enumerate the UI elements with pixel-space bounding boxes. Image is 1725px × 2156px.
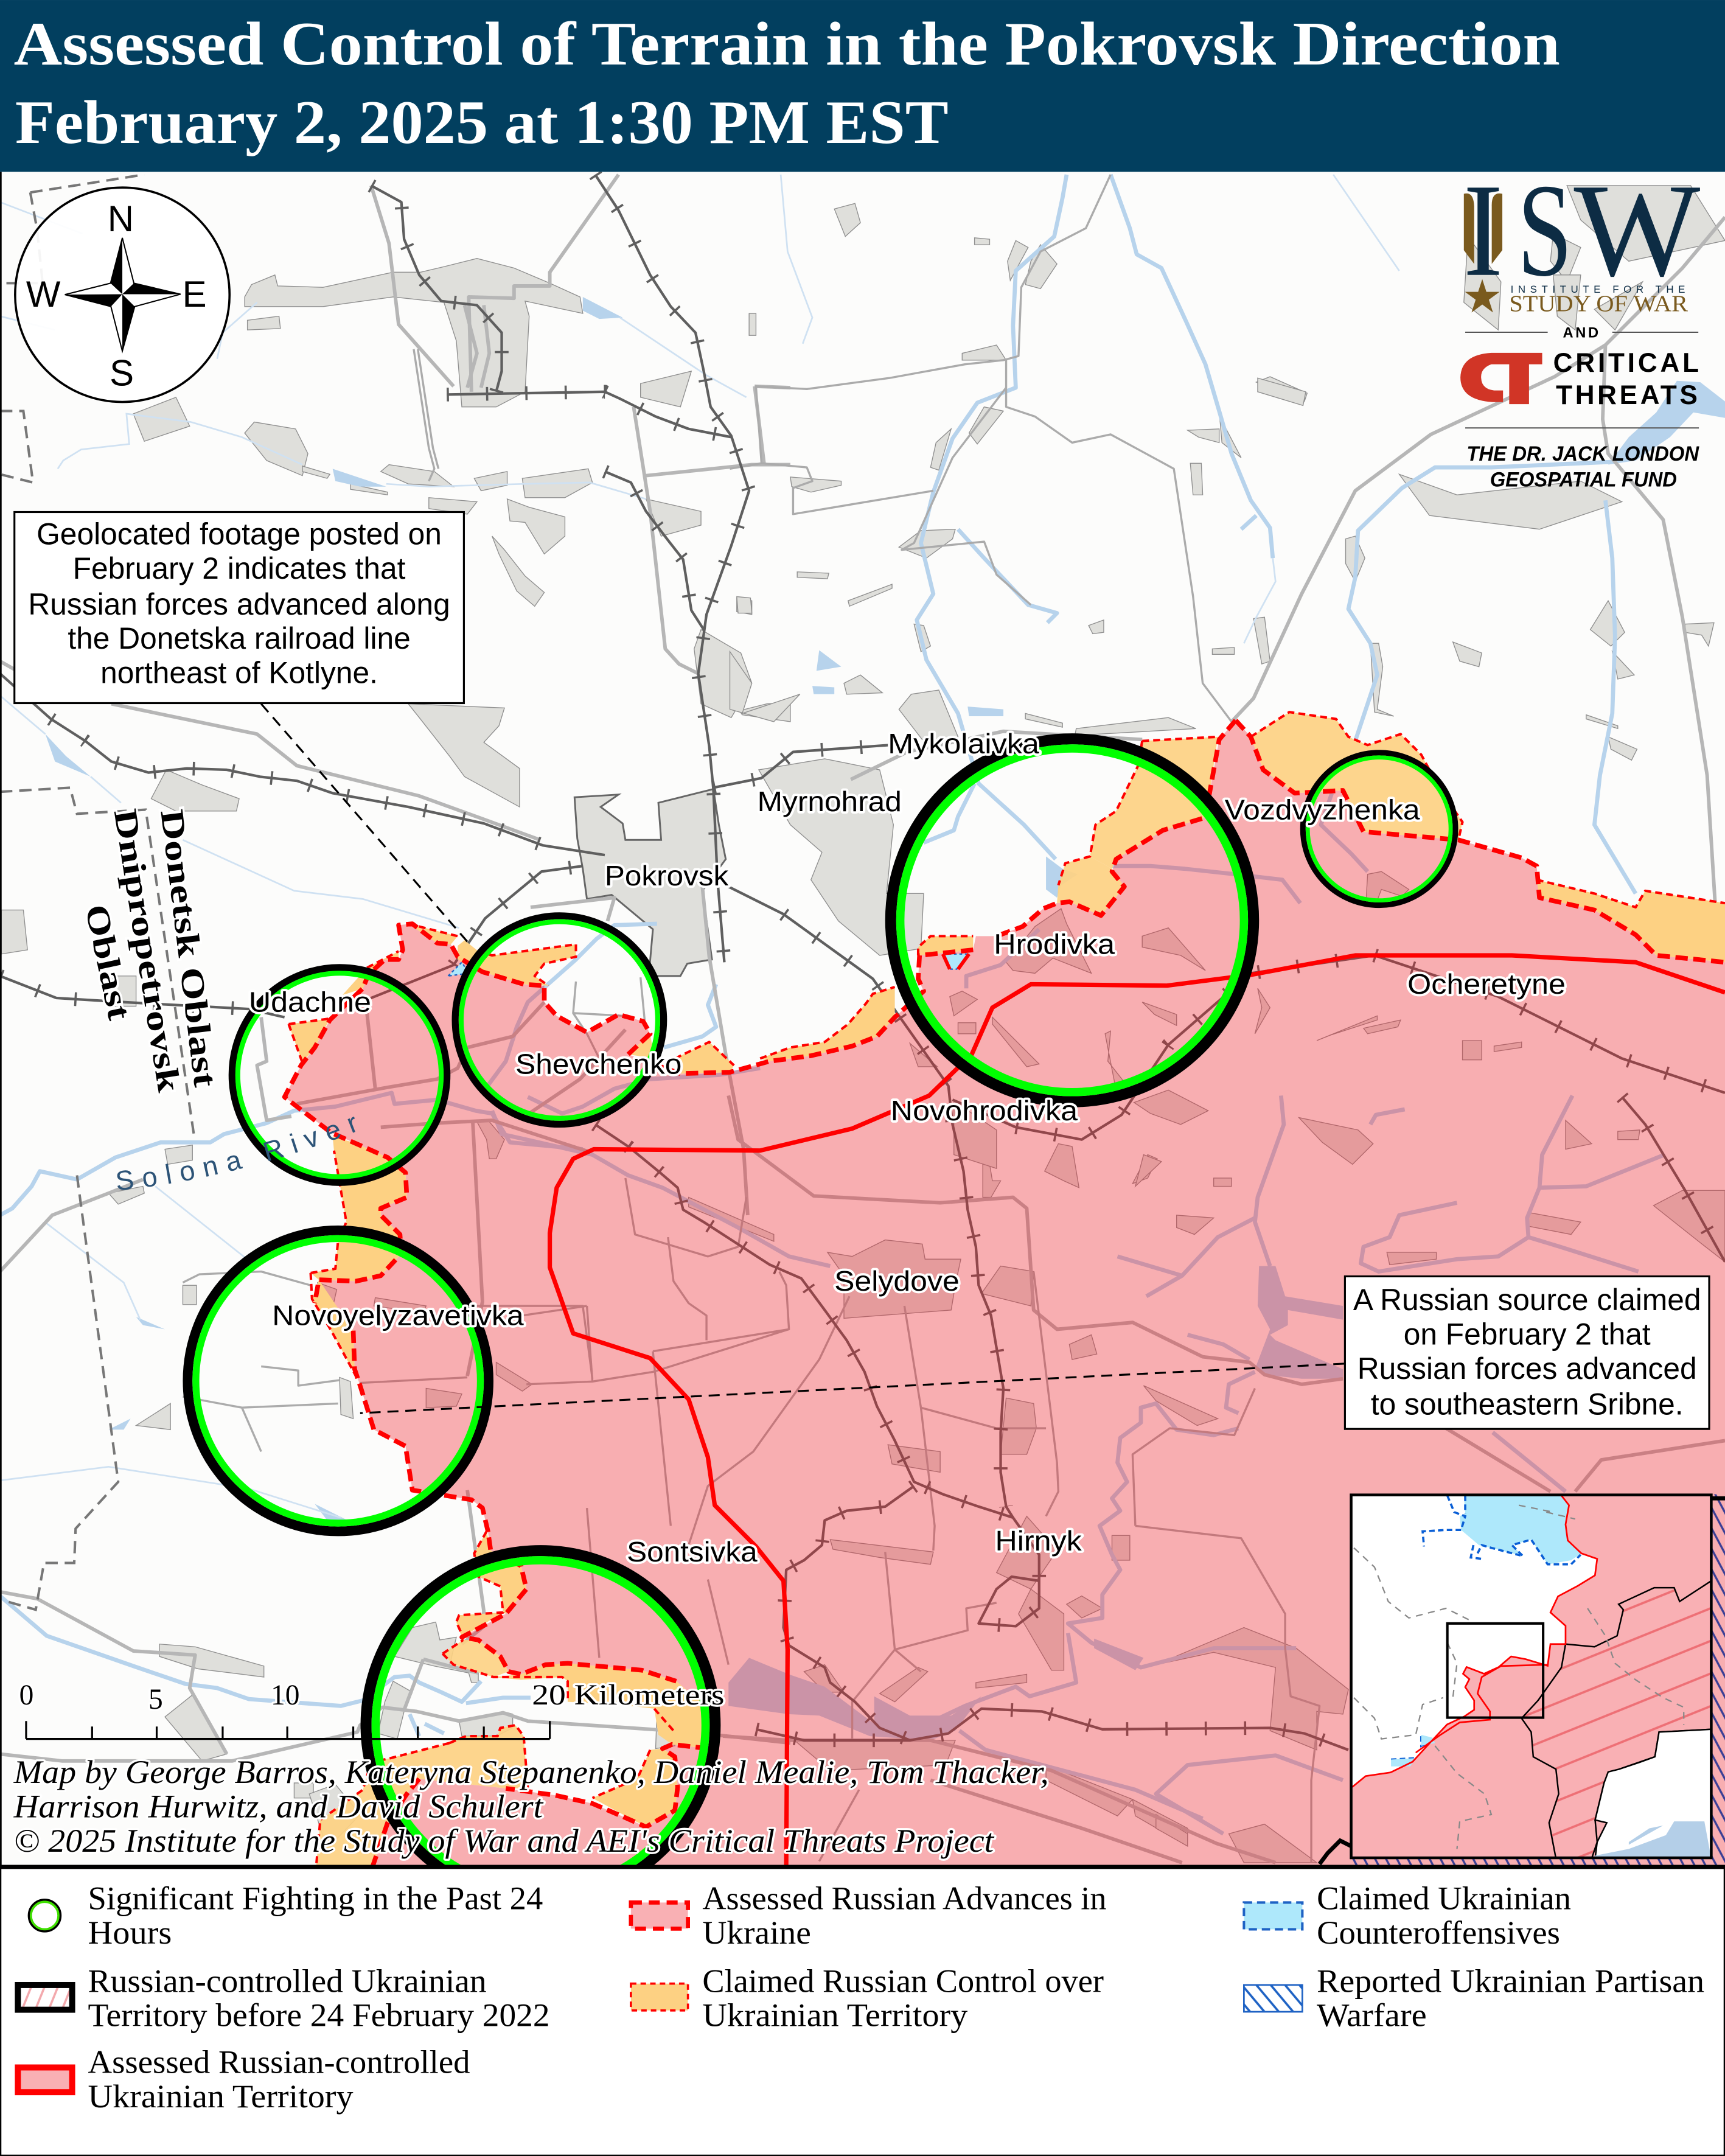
title line 2: February 2, 2025 at 1:30 PM EST bbox=[15, 88, 949, 156]
callout: Kotlyne railroad advance bbox=[15, 512, 464, 703]
towns south and east bbox=[318, 871, 1725, 1863]
inset: study area box bbox=[1448, 1624, 1543, 1718]
callout: Kotlyne railroad advance: the Donetska railroad line bbox=[68, 621, 411, 655]
logo: ISW: STUDY OF WAR bbox=[1509, 291, 1688, 317]
legend: pre-2022 territory bbox=[18, 1962, 550, 2034]
assessed Russian-controlled territory bbox=[285, 720, 1725, 1867]
inset: oblast borders bbox=[1354, 1505, 1684, 1849]
rivers bbox=[0, 175, 1665, 1833]
map credits: Map by George Barros, Kateryna Stepanenko, Daniel Mealie, Tom Thacker, bbox=[13, 1754, 1049, 1790]
legend: Ukrainian counteroffensives: Counteroffensives bbox=[1317, 1914, 1560, 1951]
railways bbox=[0, 175, 1725, 1750]
place names: Myrnohrad bbox=[758, 786, 902, 817]
logo: ISW: W bbox=[1574, 157, 1701, 304]
legend: claimed Russian control bbox=[631, 1962, 1104, 2034]
pre-2022 frontline red bbox=[550, 955, 1725, 1867]
callout: Sribne claim: on February 2 that bbox=[1404, 1317, 1651, 1351]
legend: pre-2022 territory: Territory before 24 February 2022 bbox=[88, 1997, 550, 2034]
inset: southern coast bbox=[1595, 1729, 1711, 1858]
terrain base bbox=[0, 172, 1725, 1867]
inset: frontline bbox=[1352, 1496, 1597, 1787]
legend: significant fighting: Hours bbox=[88, 1914, 172, 1951]
compass rose bbox=[15, 187, 229, 402]
circle: Udachne bbox=[232, 968, 447, 1182]
place names: Vozdvyzhenka bbox=[1225, 794, 1420, 825]
logo: Critical Threats bbox=[1460, 348, 1699, 410]
compass rose: S bbox=[110, 353, 134, 394]
oblast labels: Oblast bbox=[78, 901, 138, 1023]
logo: ISW: I bbox=[1463, 157, 1503, 304]
scale bar: 0 bbox=[19, 1680, 33, 1711]
place names: Mykolaivka bbox=[888, 728, 1039, 759]
place names: Udachne bbox=[249, 986, 371, 1018]
legend: claimed Russian control: Claimed Russian Control over bbox=[702, 1962, 1104, 1999]
legend: partisan warfare: Reported Ukrainian Partisan bbox=[1317, 1962, 1704, 1999]
circle: Novoyelyzavetivka bbox=[187, 1230, 489, 1532]
place names bbox=[249, 728, 1566, 1568]
oblast border bbox=[0, 175, 194, 1610]
place names: Ocheretyne bbox=[1407, 968, 1566, 1000]
place names: Selydove bbox=[834, 1265, 960, 1297]
legend: assessed Russian-controlled: Assessed Russian-controlled bbox=[88, 2044, 470, 2081]
legend: assessed advances bbox=[631, 1880, 1106, 1951]
leader lines bbox=[261, 704, 1344, 1413]
circle: Hrodivka bbox=[891, 739, 1253, 1102]
map credits bbox=[13, 1754, 1049, 1859]
callout: Sribne claim: to southeastern Sribne. bbox=[1371, 1387, 1684, 1421]
circle: Sontsivka bbox=[366, 1551, 715, 1900]
scale bar bbox=[19, 1680, 724, 1739]
place names: Sontsivka bbox=[627, 1536, 758, 1568]
legend: significant fighting bbox=[29, 1880, 543, 1951]
scale bar: 5 bbox=[148, 1684, 163, 1715]
partisan warfare hatch strip bbox=[1351, 1495, 1725, 1867]
oblast labels: Dnipropetrovsk bbox=[107, 806, 188, 1095]
claimed Russian control areas bbox=[288, 712, 1725, 1867]
callout: Sribne claim bbox=[1345, 1276, 1709, 1429]
place names: Novohrodivka bbox=[891, 1095, 1078, 1126]
map credits: © 2025 Institute for the Study of War and AEI's Critical Threats Project bbox=[14, 1823, 995, 1859]
inset: pre-2022 occupied hatch bbox=[1522, 1581, 1711, 1858]
logo: ISW: AND bbox=[1563, 326, 1598, 341]
callout: Kotlyne railroad advance: February 2 indicates that bbox=[73, 551, 406, 585]
oblast labels: Donetsk Oblast bbox=[153, 808, 224, 1089]
logo: Jack London fund: GEOSPATIAL FUND bbox=[1490, 469, 1677, 492]
scale bar: 10 bbox=[271, 1680, 299, 1711]
compass rose: E bbox=[183, 274, 207, 315]
circle: Shevchenko bbox=[455, 916, 664, 1124]
assessed Russian advances dashed line bbox=[285, 720, 1725, 1867]
legend: significant fighting: Significant Fighting in the Past 24 bbox=[88, 1880, 543, 1917]
map credits: Harrison Hurwitz, and David Schulert bbox=[13, 1788, 544, 1824]
towns north and west bbox=[1, 186, 1725, 1849]
legend: assessed advances: Ukraine bbox=[702, 1914, 811, 1951]
logo: ISW bbox=[1463, 157, 1701, 428]
callout: Kotlyne railroad advance: northeast of Kotlyne. bbox=[100, 656, 378, 690]
inset: Ukrainian counteroffensive bbox=[1460, 1496, 1581, 1565]
callout: Sribne claim: Russian forces advanced bbox=[1357, 1352, 1697, 1386]
town: Pokrovsk bbox=[574, 789, 726, 976]
inset: occupied territory bbox=[1351, 1496, 1711, 1858]
place names: Novoyelyzavetivka bbox=[272, 1300, 524, 1331]
legend: assessed Russian-controlled: Ukrainian Territory bbox=[88, 2078, 354, 2115]
legend: assessed advances: Assessed Russian Advances in bbox=[702, 1880, 1106, 1917]
logo: ISW: INSTITUTE FOR THE bbox=[1511, 284, 1685, 295]
legend: assessed Russian-controlled bbox=[18, 2044, 470, 2115]
logo: ISW: S bbox=[1518, 157, 1572, 304]
place names: Pokrovsk bbox=[605, 860, 729, 891]
oblast labels bbox=[78, 806, 224, 1095]
town: Myrnohrad bbox=[759, 759, 924, 955]
title banner bbox=[0, 0, 1725, 172]
inset locator map bbox=[1351, 1495, 1711, 1858]
legend: claimed Russian control: Ukrainian Territory bbox=[702, 1997, 967, 2034]
logo: Jack London fund bbox=[1466, 442, 1700, 492]
Ukrainian counterattack patches bbox=[448, 954, 969, 976]
logo: Jack London fund: THE DR. JACK LONDON bbox=[1466, 442, 1700, 466]
circle: Vozdvyzhenka bbox=[1303, 753, 1455, 905]
legend: pre-2022 territory: Russian-controlled Ukrainian bbox=[88, 1962, 487, 1999]
callout: Kotlyne railroad advance: Russian forces advanced along bbox=[28, 587, 450, 621]
legend: partisan warfare bbox=[1244, 1962, 1704, 2034]
logo: Critical Threats: THREATS bbox=[1556, 380, 1698, 410]
legend: partisan warfare: Warfare bbox=[1317, 1997, 1427, 2034]
place names: Shevchenko bbox=[515, 1048, 681, 1080]
significant fighting circles bbox=[187, 739, 1455, 1900]
legend: Ukrainian counteroffensives bbox=[1244, 1880, 1571, 1951]
legend: Ukrainian counteroffensives: Claimed Ukrainian bbox=[1317, 1880, 1571, 1917]
road network bbox=[0, 175, 1725, 1863]
claimed control dashed edges bbox=[288, 712, 1725, 1867]
callout: Sribne claim: A Russian source claimed bbox=[1353, 1283, 1701, 1317]
map left edge bbox=[0, 172, 2, 1867]
ISW and Critical Threats logos bbox=[1460, 157, 1701, 492]
compass rose: N bbox=[108, 198, 134, 239]
lakes and reservoirs bbox=[46, 297, 1725, 1740]
logo: Critical Threats: CRITICAL bbox=[1553, 348, 1699, 378]
callout: Kotlyne railroad advance: Geolocated footage posted on bbox=[37, 517, 442, 551]
compass rose: W bbox=[26, 274, 61, 315]
place names: Hrodivka bbox=[994, 929, 1115, 960]
place names: Hirnyk bbox=[995, 1525, 1082, 1557]
legend panel bbox=[0, 1865, 1725, 2155]
Solona River label: Solona River bbox=[117, 1117, 355, 1190]
title line 1: Assessed Control of Terrain in the Pokrovsk Direction bbox=[14, 9, 1560, 78]
occupied border stub bbox=[1320, 1498, 1725, 1864]
scale bar: 20 Kilometers bbox=[532, 1680, 724, 1711]
